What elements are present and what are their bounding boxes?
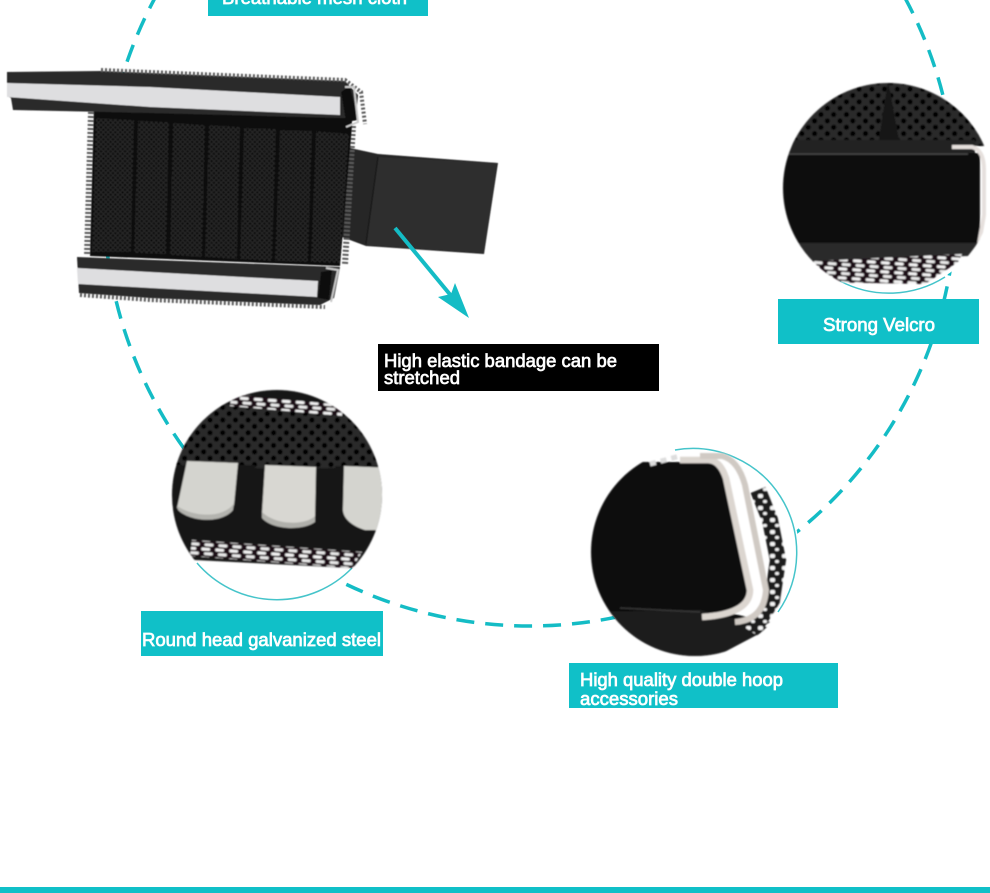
- side stitching: [87, 112, 353, 264]
- bottom rule: [0, 887, 990, 893]
- top strap: [7, 70, 365, 127]
- label: round head galvanized steel: [141, 611, 383, 656]
- dashed connector ring: [104, 0, 956, 626]
- label: strong velcro: [778, 299, 979, 344]
- bottom strap: [77, 257, 340, 307]
- label: high elastic bandage: High elastic bandage can be: [384, 351, 617, 371]
- detail circle: velcro: [780, 80, 990, 293]
- mesh weight pockets: [90, 106, 352, 266]
- label: high elastic bandage: [378, 344, 659, 391]
- detail circle: double hoop: [585, 448, 799, 665]
- detail circle: galvanized steel: [165, 385, 395, 600]
- elastic bandage: [342, 148, 498, 254]
- label: double hoop accessories: High quality double hoop: [580, 670, 783, 690]
- label: high elastic bandage: stretched: [384, 368, 460, 388]
- label: double hoop accessories: [569, 663, 838, 709]
- label: strong velcro: Strong Velcro: [823, 315, 935, 335]
- label: round head galvanized steel: Round head galvanized steel: [142, 630, 381, 650]
- label: breathable mesh cloth: [208, 0, 428, 16]
- product photo: weighted strap: [7, 70, 498, 307]
- arrow: elastic callout: [395, 228, 469, 318]
- label: double hoop accessories: accessories: [580, 689, 678, 709]
